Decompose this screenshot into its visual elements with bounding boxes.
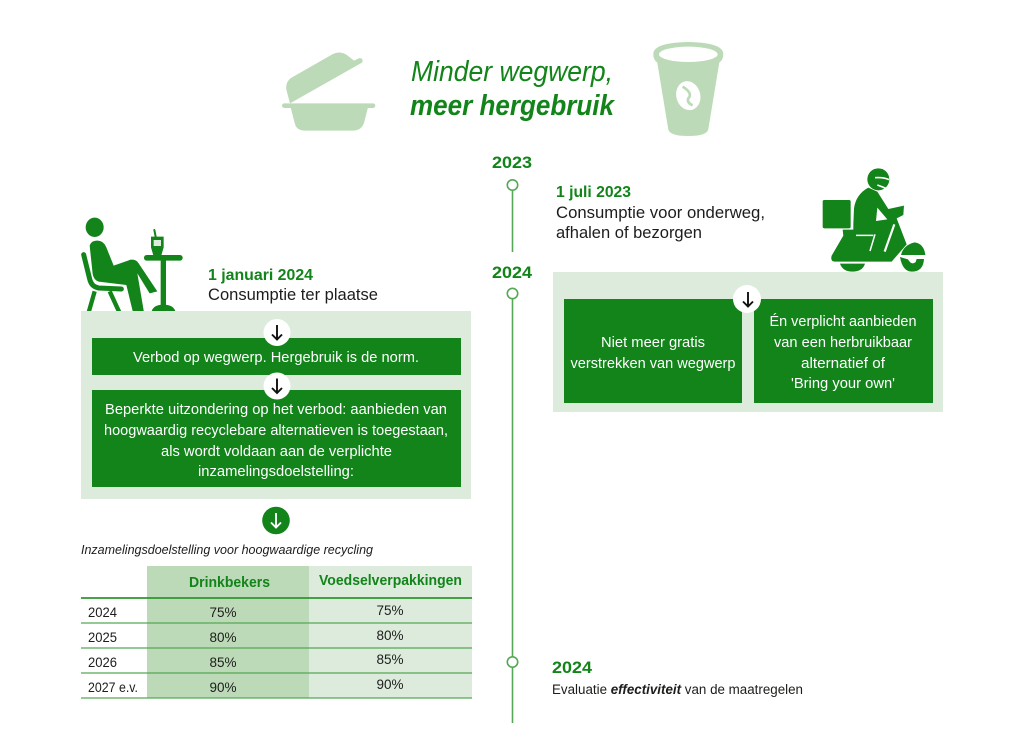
box: niet meer gratis: verstrekken van wegwerp xyxy=(570,356,736,372)
column drinkbekers values: 80% xyxy=(209,630,237,645)
panel: consumptie onderweg xyxy=(553,272,943,412)
box: verplicht aanbieden: 'Bring your own' xyxy=(791,376,895,392)
year label 2023: 2023 xyxy=(492,153,532,172)
box: beperkte uitzondering xyxy=(92,390,461,487)
evaluation year: 2024 xyxy=(552,658,593,677)
icon: arrow down 1 xyxy=(264,319,290,346)
column voedselverpakkingen values: 75% xyxy=(376,603,404,618)
table row labels xyxy=(88,605,138,695)
table row labels: 2025 xyxy=(88,630,117,645)
column voedselverpakkingen values xyxy=(376,603,404,692)
table header xyxy=(189,573,462,591)
box: verplicht aanbieden xyxy=(754,299,933,403)
box: beperkte uitzondering: inzamelingsdoelstelling: xyxy=(198,464,354,480)
date heading: 1 juli 2023: 1 juli 2023 xyxy=(556,184,631,201)
column drinkbekers values: 90% xyxy=(209,680,237,695)
icon: arrow down 2 xyxy=(264,372,290,400)
icon: arrow down 3 xyxy=(733,285,761,313)
box: niet meer gratis xyxy=(564,299,742,403)
column drinkbekers values: 85% xyxy=(209,655,237,670)
box: beperkte uitzondering: hoogwaardig recyclebare alternatieven is toegestaan, xyxy=(104,423,448,439)
column voedselverpakkingen values: 80% xyxy=(376,628,404,643)
year label 2024: 2024 xyxy=(492,263,533,282)
subheading: consumptie onderweg xyxy=(556,204,765,242)
subheading: consumptie ter plaatse: Consumptie ter plaatse xyxy=(208,286,378,304)
box: beperkte uitzondering: als wordt voldaan aan de verplichte xyxy=(161,444,392,460)
box: verplicht aanbieden: Én verplicht aanbieden xyxy=(770,313,916,330)
column drinkbekers values: 75% xyxy=(209,605,237,620)
icon: delivery scooter xyxy=(823,168,925,272)
column voedselverpakkingen values: 90% xyxy=(376,677,404,692)
subheading: consumptie onderweg: Consumptie voor onderweg, xyxy=(556,204,765,222)
table row labels: 2026 xyxy=(88,655,117,670)
panel: consumptie ter plaatse xyxy=(81,311,471,499)
subheading: consumptie onderweg: afhalen of bezorgen xyxy=(556,224,702,242)
title: meer hergebruik xyxy=(410,90,616,122)
title: Minder wegwerp, xyxy=(411,56,613,88)
box: verplicht aanbieden: alternatief of xyxy=(801,356,886,372)
icon: seated person at table xyxy=(84,218,183,312)
icon: food container xyxy=(282,52,375,131)
table row labels: 2027 e.v. xyxy=(88,680,138,695)
box: verplicht aanbieden: van een herbruikbaar xyxy=(774,335,912,351)
icon: green arrow down xyxy=(262,507,290,534)
timeline xyxy=(507,180,518,723)
table header: Voedselverpakkingen xyxy=(319,573,462,589)
box: beperkte uitzondering: Beperkte uitzondering op het verbod: aanbieden van xyxy=(105,402,447,418)
table: inzamelingsdoelstelling xyxy=(81,566,472,698)
box: niet meer gratis: Niet meer gratis xyxy=(601,335,705,351)
table row labels: 2024 xyxy=(88,605,117,620)
box: verbod op wegwerp: Verbod op wegwerp. Hergebruik is de norm. xyxy=(133,350,419,366)
column voedselverpakkingen values: 85% xyxy=(376,652,404,667)
table header: Drinkbekers xyxy=(189,575,270,591)
table caption: Inzamelingsdoelstelling voor hoogwaardige recycling xyxy=(81,542,374,557)
box: verbod op wegwerp xyxy=(92,338,461,375)
icon: coffee cup xyxy=(653,42,723,136)
date heading: 1 januari 2024: 1 januari 2024 xyxy=(208,267,313,284)
title xyxy=(410,56,616,122)
evaluation text: Evaluatie effectiviteit van de maatregelen xyxy=(552,682,803,697)
column drinkbekers values xyxy=(209,605,237,695)
